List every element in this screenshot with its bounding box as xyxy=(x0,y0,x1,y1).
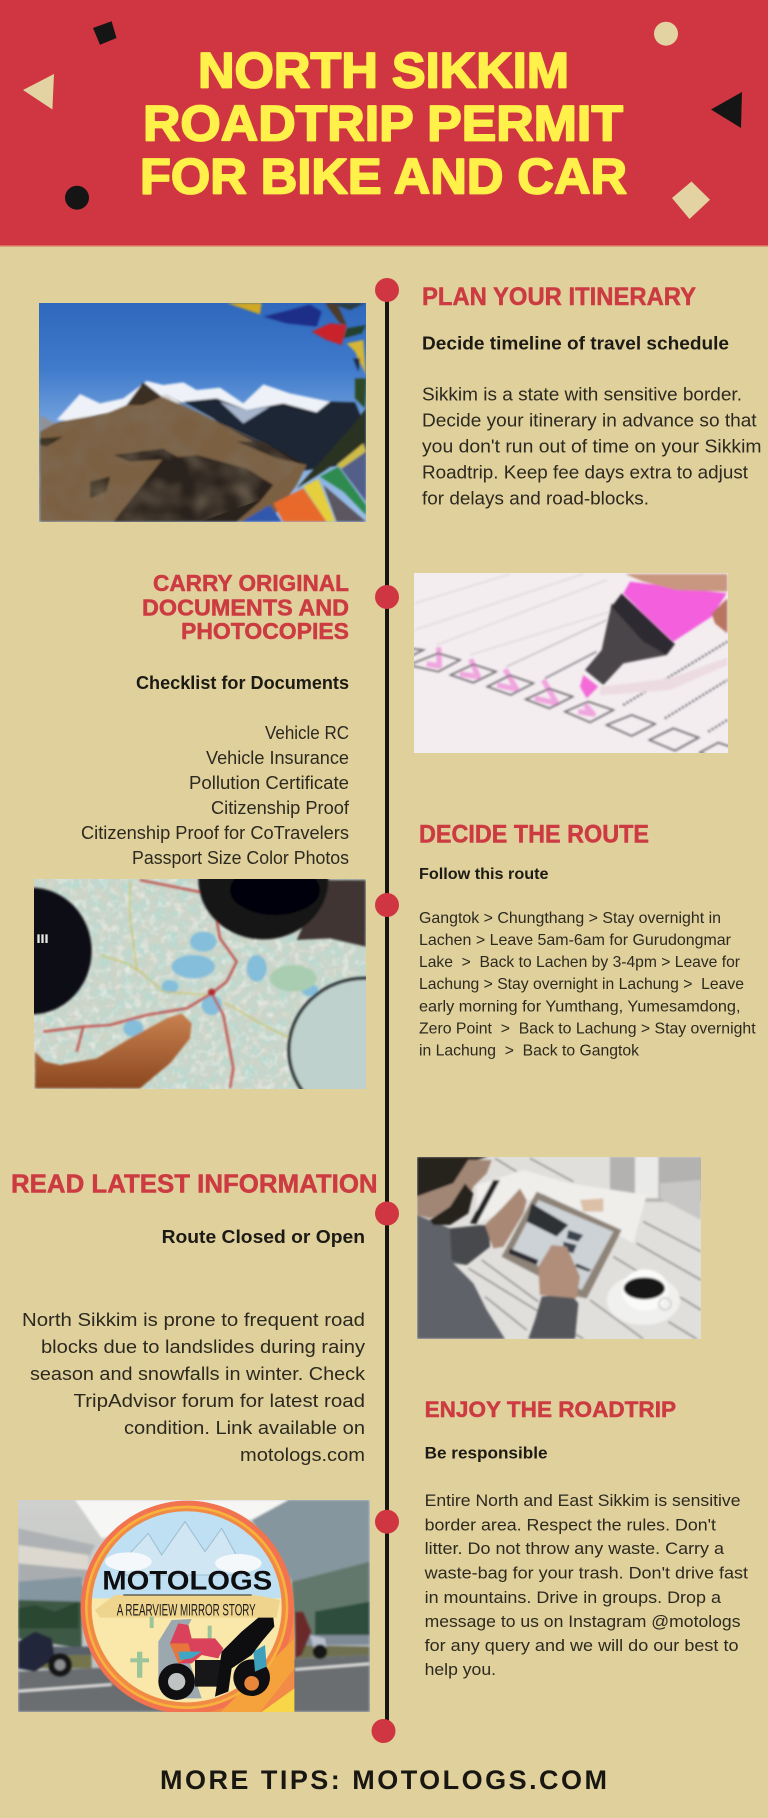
text block: enjoy the roadtrip: for any query and we will do our best to xyxy=(425,1637,738,1655)
decorative shape: black triangle xyxy=(711,92,742,128)
text block: road blocks: motologs.com xyxy=(240,1444,365,1465)
heading: enjoy the roadtrip: ENJOY THE ROADTRIP xyxy=(425,1397,676,1422)
decorative shape: black diamond xyxy=(93,21,116,45)
timeline marker 4 xyxy=(375,1202,399,1226)
title: NORTH SIKKIM xyxy=(198,42,569,98)
text block: enjoy the roadtrip: Entire North and East Sikkim is sensitive xyxy=(425,1492,740,1510)
text block: road blocks: North Sikkim is prone to frequent road xyxy=(22,1309,365,1330)
document list: Pollution Certificate xyxy=(189,772,349,793)
document list xyxy=(81,722,350,868)
heading: plan your itinerary: PLAN YOUR ITINERARY xyxy=(422,283,696,311)
text block: route xyxy=(419,910,756,1060)
text block: plan your itinerary: you don't run out of time on your Sikkim xyxy=(422,436,762,456)
subheading: follow this route: Follow this route xyxy=(419,866,549,883)
photo: bikers on highway with Motologs logo xyxy=(18,1500,370,1714)
heading: read latest information: READ LATEST INFORMATION xyxy=(11,1168,378,1198)
subheading: route closed or open: Route Closed or Open xyxy=(162,1227,365,1247)
subheading: checklist: Checklist for Documents xyxy=(136,673,349,693)
text block: route: Gangtok > Chungthang > Stay overnight in xyxy=(419,910,721,927)
text block: plan your itinerary: Sikkim is a state with sensitive border. xyxy=(422,384,742,404)
decorative shape: black circle xyxy=(65,186,89,210)
text block: enjoy the roadtrip xyxy=(424,1492,748,1679)
logo text: Motologs: MOTOLOGS xyxy=(102,1565,272,1595)
photo: man using tablet with coffee xyxy=(417,1157,703,1339)
timeline marker 2 xyxy=(375,585,399,609)
document list: Vehicle RC xyxy=(265,722,349,743)
document list: Vehicle Insurance xyxy=(206,747,349,768)
text block: road blocks: blocks due to landslides during rainy xyxy=(41,1336,366,1357)
text block: route: in Lachung > Back to Gangtok xyxy=(419,1043,640,1060)
timeline marker 3 xyxy=(375,893,399,917)
bottom flags xyxy=(242,505,282,522)
decorative shape: cream circle xyxy=(654,22,678,46)
left bike xyxy=(18,1632,55,1672)
footer: more tips: MORE TIPS: MOTOLOGS.COM xyxy=(160,1765,607,1795)
photo: mountains with prayer flags xyxy=(39,303,366,522)
logo motorbike xyxy=(158,1663,195,1700)
heading: decide the route: DECIDE THE ROUTE xyxy=(419,820,649,848)
text block: road blocks: season and snowfalls in winter. Check xyxy=(30,1363,366,1384)
right bike xyxy=(295,1612,312,1658)
text block: route: Zero Point > Back to Lachung > Stay overnight xyxy=(419,1020,756,1038)
photo: checklist with pink highlighter xyxy=(414,573,728,753)
top flags xyxy=(227,303,262,314)
heading: carry original documents: DOCUMENTS AND xyxy=(142,595,349,621)
logo corner and rings xyxy=(208,1608,294,1712)
text block: enjoy the roadtrip: litter. Do not throw any waste. Carry a xyxy=(425,1540,725,1558)
timeline line xyxy=(385,290,389,1731)
document list: Citizenship Proof for CoTravelers xyxy=(81,822,349,843)
text block: road blocks: TripAdvisor forum for latest road xyxy=(74,1390,365,1411)
text block: route: Lake > Back to Lachen by 3-4pm > Leave for xyxy=(419,954,741,971)
text block: plan your itinerary xyxy=(422,384,762,508)
title: ROADTRIP PERMIT xyxy=(143,96,623,152)
heading: carry original documents xyxy=(142,570,349,644)
document list: Passport Size Color Photos xyxy=(132,847,349,868)
timeline marker 1 xyxy=(375,278,399,302)
text block: plan your itinerary: Decide your itinerary in advance so that xyxy=(422,409,757,430)
text block: enjoy the roadtrip: in mountains. Drive in groups. Drop a xyxy=(425,1589,722,1607)
heading: carry original documents: PHOTOCOPIES xyxy=(181,618,349,644)
text block: enjoy the roadtrip: message to us on Instagram @motologs xyxy=(425,1613,740,1631)
photo: map with finger, lenses and magnifier xyxy=(34,879,366,1089)
timeline marker 6 xyxy=(372,1719,396,1743)
subheading: be responsible: Be responsible xyxy=(425,1444,548,1462)
text block: route: Lachen > Leave 5am-6am for Gurudongmar xyxy=(419,932,732,949)
timeline marker 5 xyxy=(375,1510,399,1534)
text block: enjoy the roadtrip: help you. xyxy=(425,1661,496,1679)
document list: Citizenship Proof xyxy=(211,797,350,818)
decorative shape: cream triangle xyxy=(23,74,54,110)
text block: plan your itinerary: for delays and road-blocks. xyxy=(422,488,649,508)
title: FOR BIKE AND CAR xyxy=(140,148,627,204)
subheading: decide timeline: Decide timeline of travel schedule xyxy=(422,334,729,354)
text block: route: Lachung > Stay overnight in Lachung > Leave xyxy=(419,976,744,993)
header banner xyxy=(0,0,768,246)
text block: road blocks: condition. Link available on xyxy=(124,1417,365,1438)
text block: enjoy the roadtrip: waste-bag for your trash. Don't drive fast xyxy=(424,1564,748,1582)
decorative shape: cream diamond xyxy=(672,182,710,219)
text block: enjoy the roadtrip: border area. Respect the rules. Don't xyxy=(425,1516,716,1534)
text block: route: early morning for Yumthang, Yumesamdong, xyxy=(419,998,740,1016)
text block: road blocks xyxy=(22,1309,366,1465)
title xyxy=(140,42,627,204)
logo text: tagline: A REARVIEW MIRROR STORY xyxy=(117,1602,256,1620)
heading: carry original documents: CARRY ORIGINAL xyxy=(153,570,349,596)
text block: plan your itinerary: Roadtrip. Keep fee days extra to adjust xyxy=(422,462,748,483)
